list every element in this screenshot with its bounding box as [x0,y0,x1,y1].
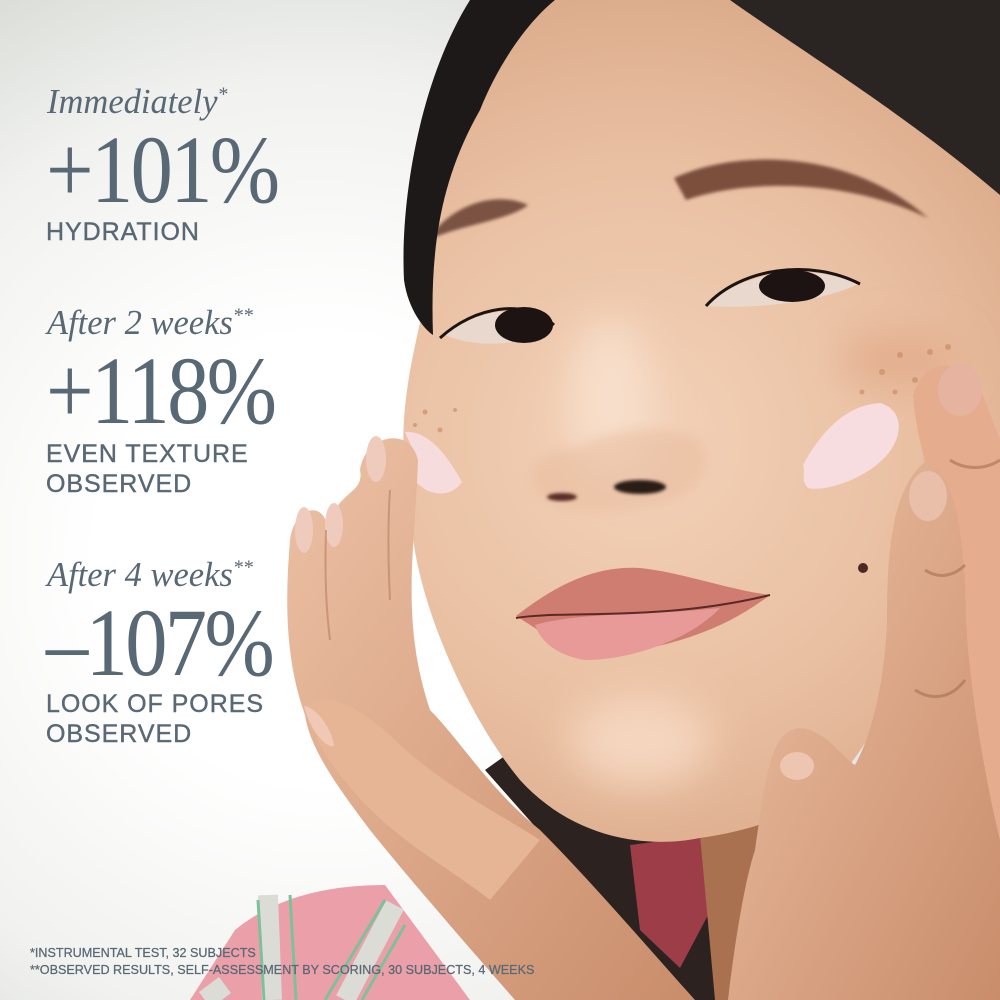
metric label [46,690,264,748]
mole [858,563,868,573]
value: +118% [46,337,274,444]
stat: after 2 weeks even texture [45,304,274,498]
footnotes: **OBSERVED RESULTS, SELF-ASSESSMENT BY SCORING, 30 SUBJECTS, 4 WEEKS [30,963,534,977]
nostrils [547,480,666,501]
cheek highlights [570,320,960,785]
timing label: Immediately* [47,83,228,121]
eyebrows [428,160,928,240]
footnotes [30,946,534,977]
hair [404,0,1000,335]
scarf [630,835,716,968]
stat: immediately hydration [46,83,278,246]
nose shadow [530,429,706,512]
metric label: OBSERVED [46,470,192,498]
timing label: After 2 weeks** [47,304,253,342]
right eye [706,270,860,307]
face [403,0,1000,842]
metric label [46,440,249,498]
value: –107% [46,589,272,696]
metric label: LOOK OF PORES [46,690,264,718]
metric label: OBSERVED [46,720,192,748]
cream on left cheek [405,432,462,494]
left eye [440,307,554,344]
metric label: EVEN TEXTURE [46,440,249,468]
lips [516,568,770,660]
neck shadow and hair behind neck [485,745,760,1000]
neck [700,790,790,1000]
right hand [728,364,1000,1000]
shirt [190,885,470,1000]
freckles [413,344,951,432]
value: +101% [46,116,278,223]
left hand [287,436,695,1000]
metric label: HYDRATION [46,218,200,246]
timing label: After 4 weeks** [47,556,253,594]
footnotes: *INSTRUMENTAL TEST, 32 SUBJECTS [30,946,256,960]
cream on right cheek [803,403,899,489]
stat: after 4 weeks look of pores [45,556,272,748]
